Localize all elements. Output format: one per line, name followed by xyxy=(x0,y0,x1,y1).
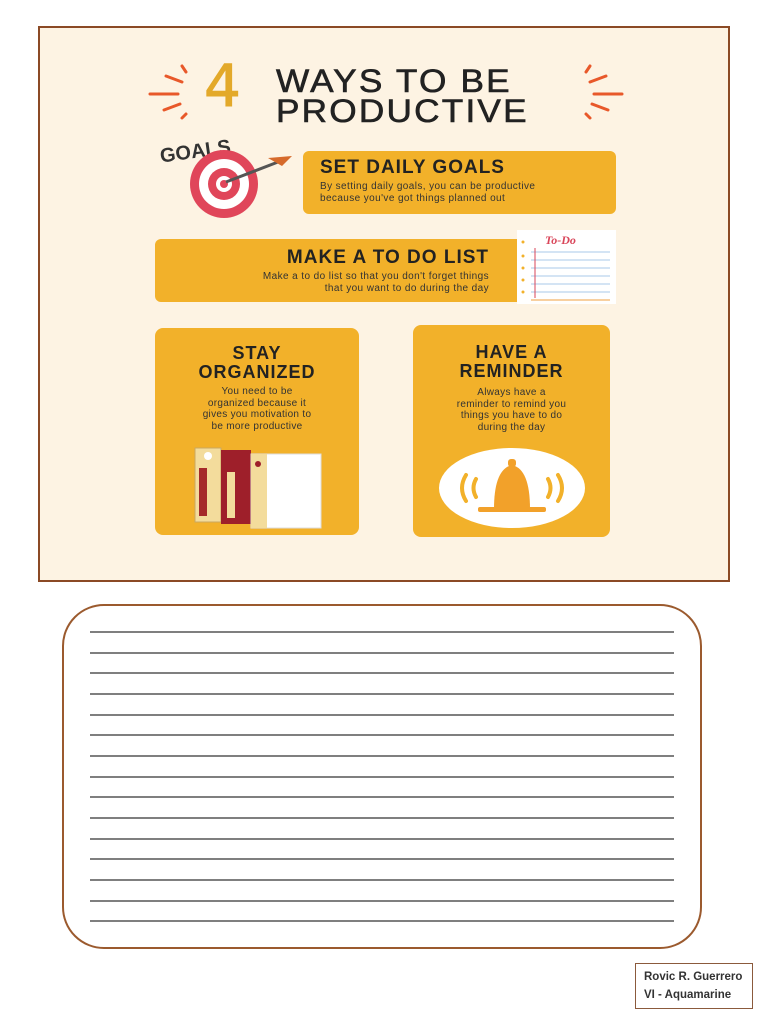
icon: sparkle lines left xyxy=(148,64,188,120)
text: Always have a xyxy=(477,387,546,398)
icon: to-do note: To-Do xyxy=(545,233,576,247)
icon: books xyxy=(194,448,322,528)
text xyxy=(320,181,535,204)
panel: have a reminder xyxy=(413,325,610,537)
icon: bell xyxy=(439,448,585,528)
heading: REMINDER xyxy=(459,361,564,381)
text: By setting daily goals, you can be productive xyxy=(320,181,535,192)
writing lines xyxy=(90,631,674,922)
text: things you have to do xyxy=(461,410,562,421)
heading: STAY xyxy=(232,343,282,363)
heading text: WAYS TO BE xyxy=(276,63,512,99)
heading xyxy=(198,343,316,382)
icon: goals target xyxy=(159,136,292,218)
icon: goals target: GOALS xyxy=(159,136,232,168)
heading text xyxy=(276,63,529,129)
icon: to-do note xyxy=(517,230,616,304)
panel: writing lines box xyxy=(62,604,702,949)
heading: HAVE A xyxy=(475,342,548,362)
name box: Rovic R. Guerrero xyxy=(644,971,742,983)
name box xyxy=(635,963,753,1009)
big number 4: 4 xyxy=(204,52,241,120)
text xyxy=(457,387,566,432)
text: be more productive xyxy=(211,420,302,432)
title xyxy=(148,52,624,129)
text: reminder to remind you xyxy=(457,398,566,410)
text: gives you motivation to xyxy=(203,409,311,420)
heading: SET DAILY GOALS xyxy=(320,157,505,178)
text xyxy=(263,271,489,294)
heading xyxy=(459,342,564,381)
text: because you've got things planned out xyxy=(320,192,505,204)
text: organized because it xyxy=(208,398,306,408)
icon: sparkle lines right xyxy=(584,64,624,120)
heading text: PRODUCTIVE xyxy=(276,93,529,129)
text: You need to be xyxy=(221,386,293,397)
heading: MAKE A TO DO LIST xyxy=(287,247,489,268)
text: Make a to do list so that you don't forget things xyxy=(263,271,489,282)
heading: ORGANIZED xyxy=(198,362,316,382)
text xyxy=(203,386,311,432)
text: during the day xyxy=(478,422,545,432)
panel: make a to do list xyxy=(155,239,525,302)
panel: infographic frame xyxy=(38,26,730,582)
text: that you want to do during the day xyxy=(325,282,489,294)
panel: set daily goals xyxy=(303,151,616,214)
name box: VI - Aquamarine xyxy=(644,989,731,1001)
panel: stay organized xyxy=(155,328,359,535)
